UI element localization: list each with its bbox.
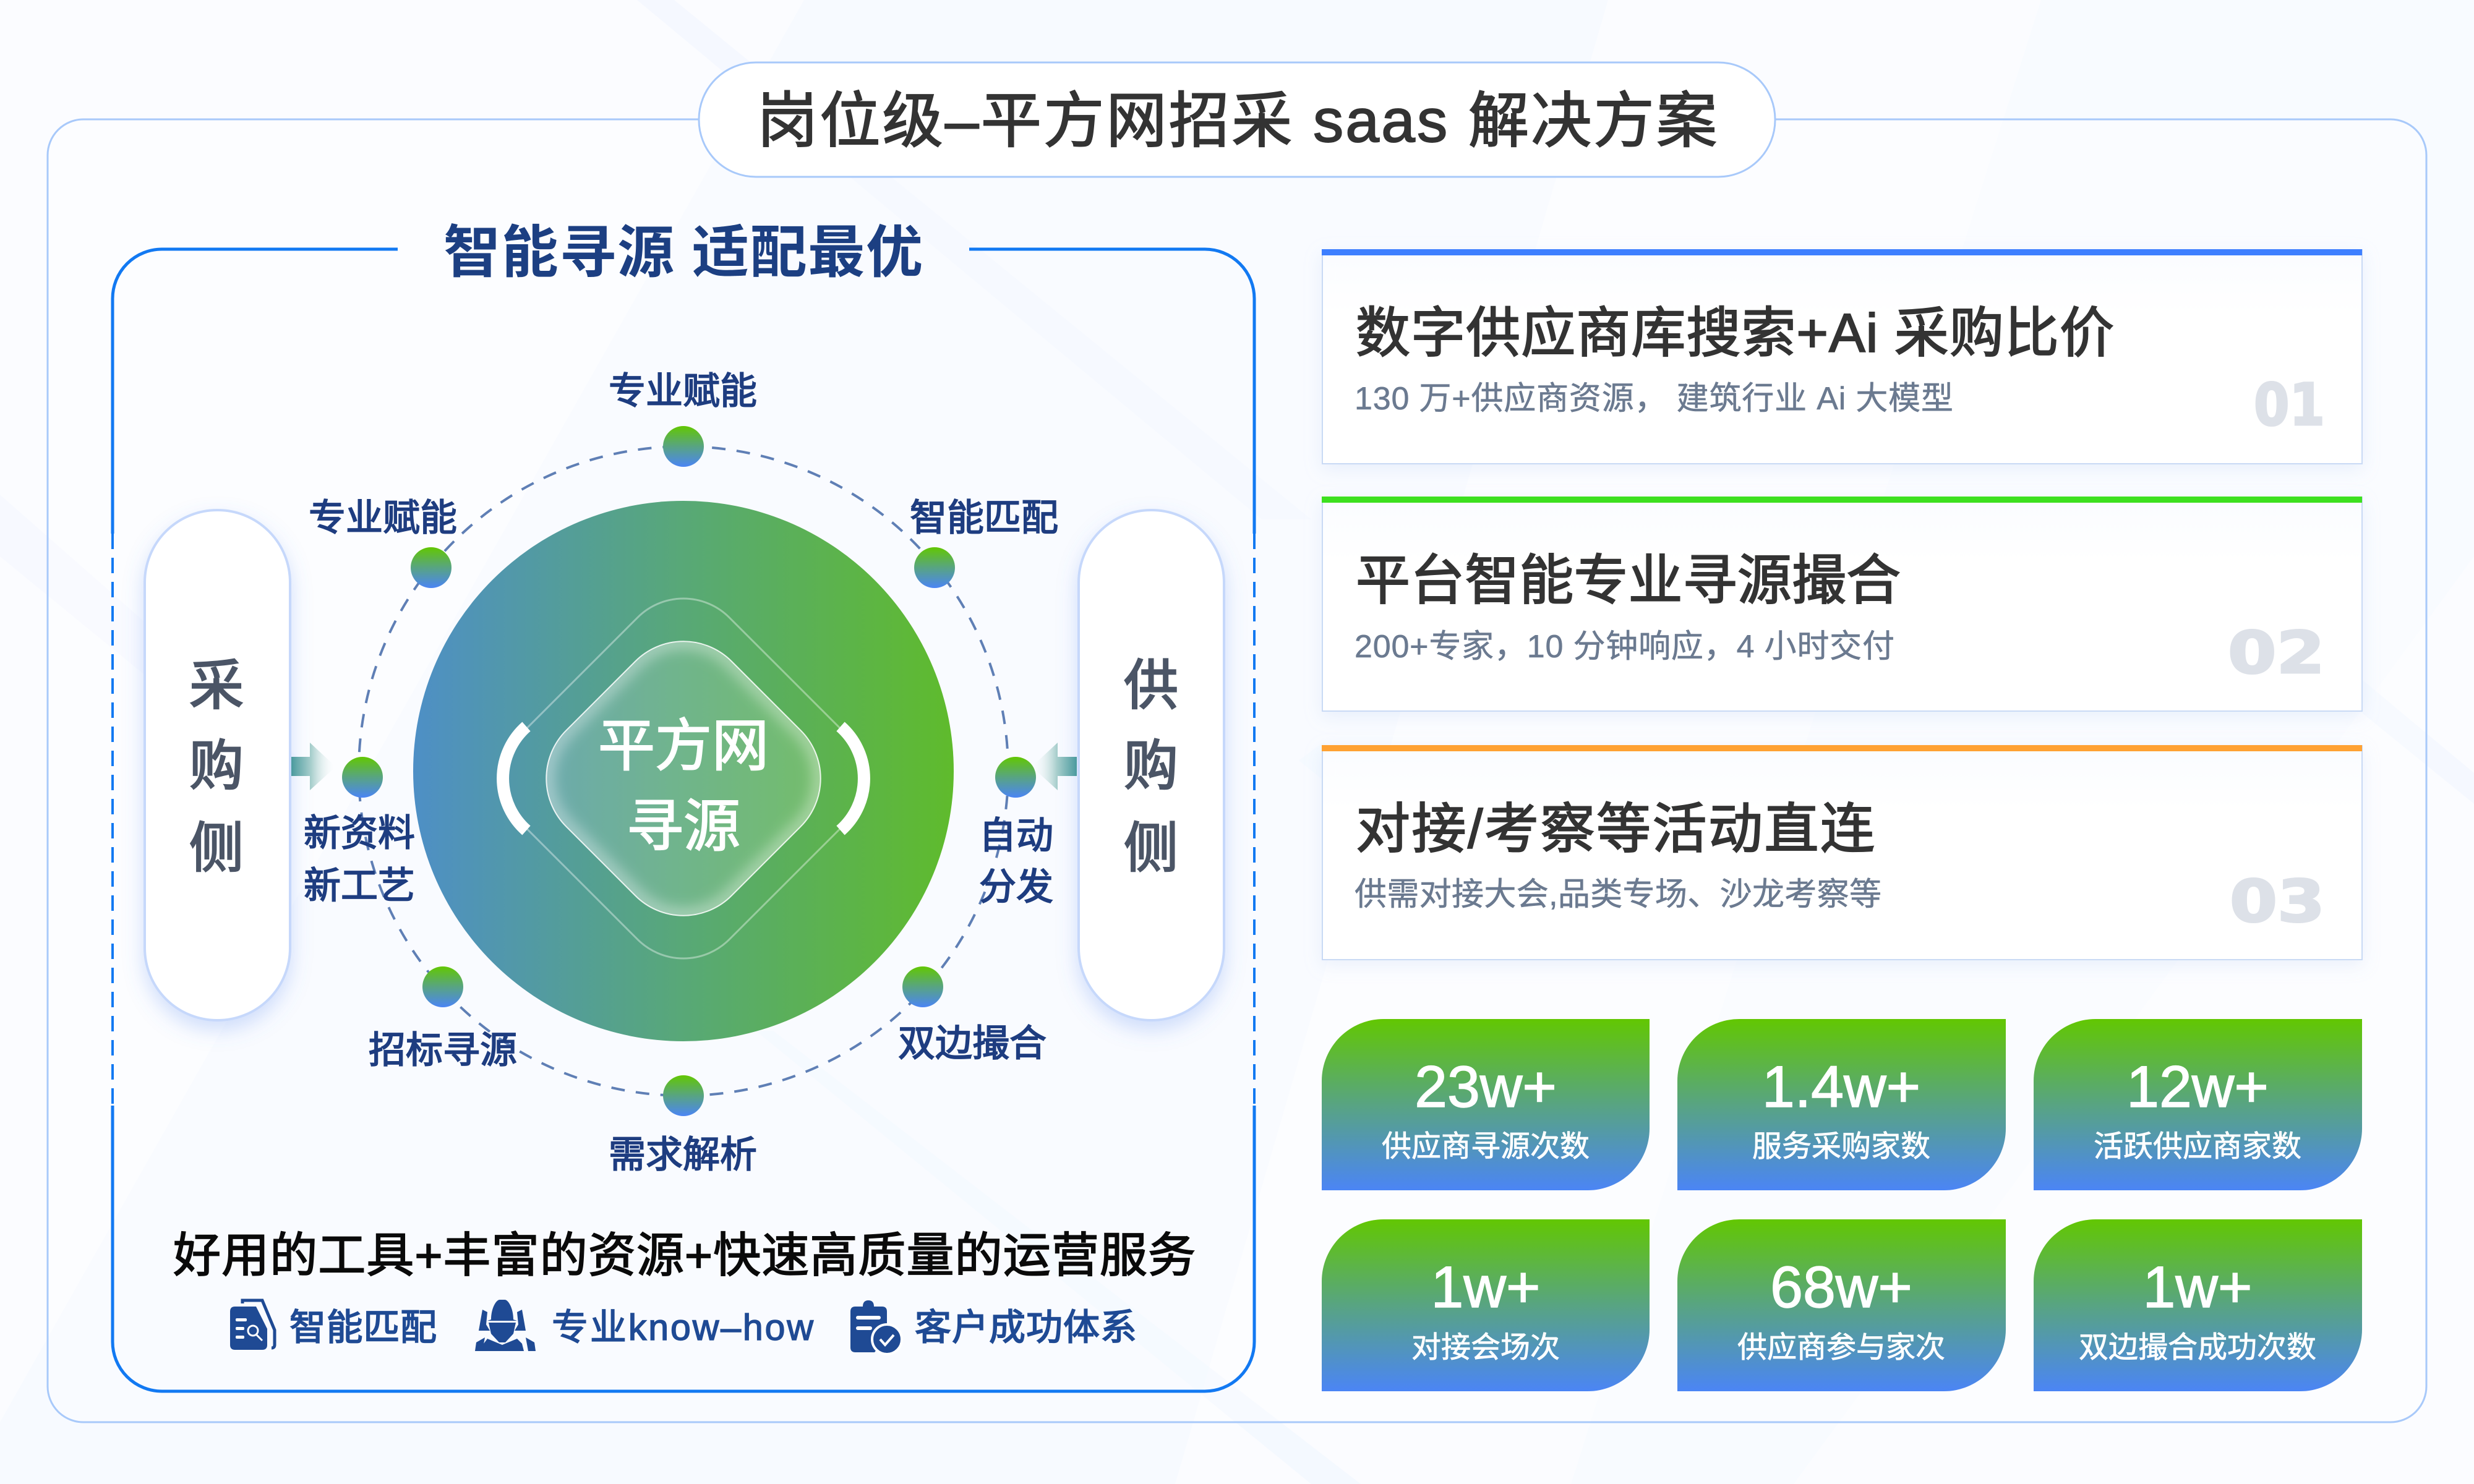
node labels: 需求解析 xyxy=(609,1134,757,1175)
panel: smart sourcing xyxy=(113,221,1254,1391)
left pill: buyer side: 购 xyxy=(189,735,244,796)
node labels: 自动 xyxy=(979,815,1053,856)
card 01 xyxy=(1322,249,2362,464)
node labels: 新工艺 xyxy=(304,865,415,906)
center text: 平方网 xyxy=(598,715,769,778)
arrow right xyxy=(1032,743,1077,790)
label: customer success: 客户成功体系 xyxy=(915,1307,1137,1348)
stat: matchmaking sessions: 对接会场次 xyxy=(1411,1331,1560,1364)
stat: matchmaking sessions xyxy=(1322,1219,1650,1391)
label: professional know-how: 专业know–how xyxy=(552,1307,813,1348)
dashed ring xyxy=(359,446,1008,1096)
stat: successful matches xyxy=(2034,1219,2362,1391)
stat: successful matches: 双边撮合成功次数 xyxy=(2079,1331,2316,1364)
card subtitle: 130 万+供应商资源， 建筑行业 Ai 大模型 xyxy=(1355,381,1953,417)
node labels: 招标寻源 xyxy=(369,1030,517,1071)
stat: supplier participants: 供应商参与家次 xyxy=(1737,1331,1945,1364)
central circle xyxy=(413,501,954,1041)
left pill: buyer side xyxy=(145,510,290,1020)
card title: 对接/考察等活动直连 xyxy=(1356,798,1875,859)
stat: procurement service count: 1.4w+ xyxy=(1762,1054,1920,1120)
stat: active suppliers: 活跃供应商家数 xyxy=(2094,1130,2301,1163)
panel heading: 智能寻源 适配最优 xyxy=(443,221,923,284)
icon: document search xyxy=(230,1300,275,1350)
card 03 xyxy=(1322,745,2362,960)
stat: supplier sourcing count: 供应商寻源次数 xyxy=(1382,1130,1590,1163)
node labels: 分发 xyxy=(979,866,1053,908)
center text: 寻源 xyxy=(627,795,740,858)
right pill: supplier side: 购 xyxy=(1124,735,1178,796)
card number: 01 xyxy=(2254,372,2325,439)
icon: clipboard check xyxy=(850,1300,902,1354)
right pill: supplier side: 供 xyxy=(1124,655,1178,716)
node labels: 双边撮合 xyxy=(898,1023,1047,1064)
node labels xyxy=(304,370,1058,1175)
left pill: buyer side: 侧 xyxy=(189,817,244,879)
ring nodes xyxy=(342,426,1036,1116)
panel border xyxy=(113,249,1254,1391)
card subtitle: 供需对接大会,品类专场、沙龙考察等 xyxy=(1355,877,1881,913)
node labels: 专业赋能 xyxy=(309,497,457,539)
stat: successful matches: 1w+ xyxy=(2143,1255,2252,1320)
card 02 xyxy=(1322,497,2362,711)
card subtitle: 200+专家，10 分钟响应，4 小时交付 xyxy=(1355,629,1894,665)
arrow left xyxy=(291,743,336,790)
title pill xyxy=(699,62,1775,177)
stat: supplier participants: 68w+ xyxy=(1770,1255,1912,1320)
stat: active suppliers: 12w+ xyxy=(2126,1054,2269,1120)
summary line: 好用的工具+丰富的资源+快速高质量的运营服务 xyxy=(173,1229,1196,1282)
label: smart match: 智能匹配 xyxy=(289,1307,437,1348)
card number: 03 xyxy=(2230,868,2325,936)
node labels: 智能匹配 xyxy=(910,497,1058,539)
stat: procurement service count xyxy=(1677,1019,2006,1190)
icon: worker xyxy=(475,1300,536,1351)
white brackets xyxy=(503,727,864,830)
stat: supplier sourcing count xyxy=(1322,1019,1650,1190)
node labels: 专业赋能 xyxy=(609,370,757,412)
glass diamond xyxy=(546,641,821,916)
stat: matchmaking sessions: 1w+ xyxy=(1431,1255,1540,1320)
stat: active suppliers xyxy=(2034,1019,2362,1190)
stat: supplier participants xyxy=(1677,1219,2006,1391)
right pill: supplier side: 侧 xyxy=(1124,817,1178,879)
outer diamond outline xyxy=(527,597,840,960)
left pill: buyer side: 采 xyxy=(189,655,244,716)
card title: 数字供应商库搜索+Ai 采购比价 xyxy=(1356,302,2114,364)
card title: 平台智能专业寻源撮合 xyxy=(1356,550,1901,611)
right pill: supplier side xyxy=(1079,510,1224,1020)
node labels: 新资料 xyxy=(304,812,415,854)
stat: procurement service count: 服务采购家数 xyxy=(1752,1130,1930,1163)
title text: 岗位级–平方网招采 saas 解决方案 xyxy=(757,87,1717,155)
card number: 02 xyxy=(2228,620,2325,687)
stat: supplier sourcing count: 23w+ xyxy=(1415,1054,1557,1120)
